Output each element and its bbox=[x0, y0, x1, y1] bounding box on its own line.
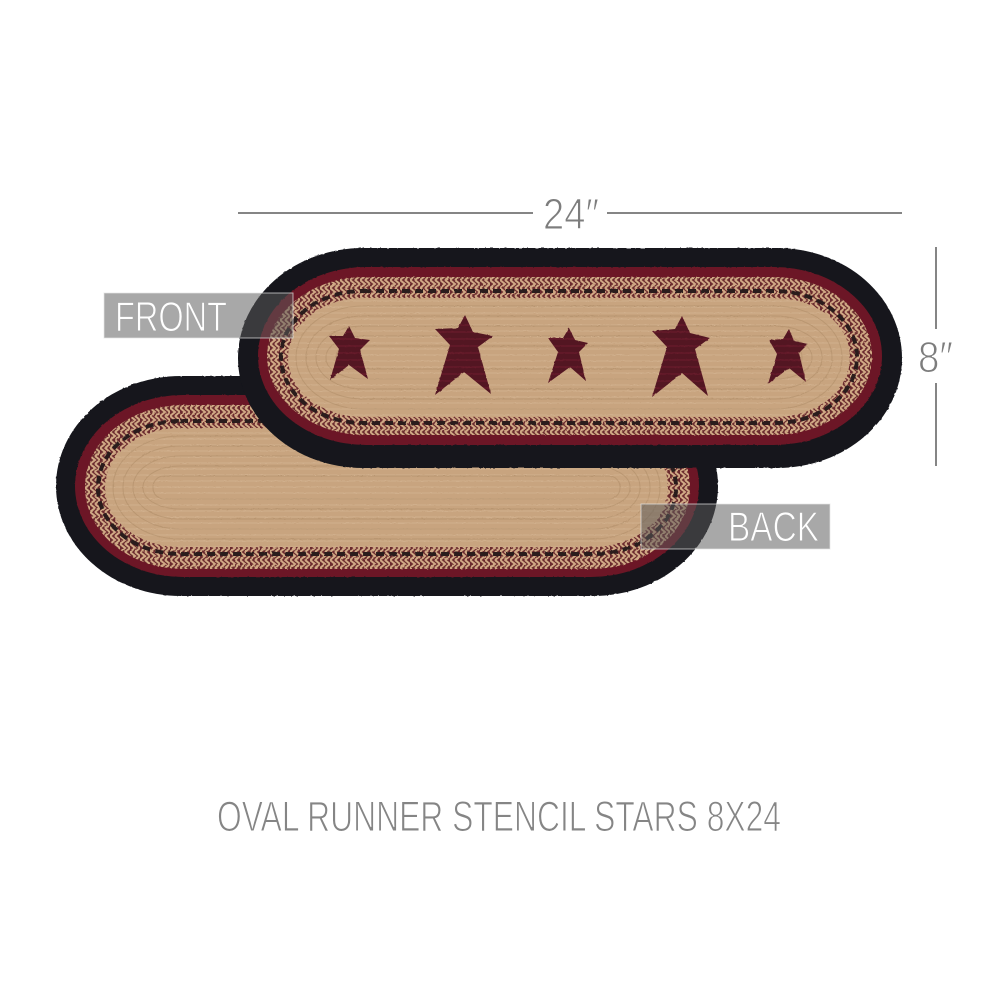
front rug bbox=[238, 248, 902, 468]
label: front: FRONT bbox=[115, 293, 227, 340]
back rug bbox=[56, 376, 718, 596]
caption: OVAL RUNNER STENCIL STARS 8X24 bbox=[217, 793, 781, 841]
height dimension: 8 inches: 8″ bbox=[918, 333, 953, 382]
width dimension: 24 inches: 24″ bbox=[543, 190, 599, 239]
stars on front rug bbox=[329, 315, 808, 397]
label: back bbox=[641, 503, 830, 550]
label: back: BACK bbox=[728, 503, 819, 550]
